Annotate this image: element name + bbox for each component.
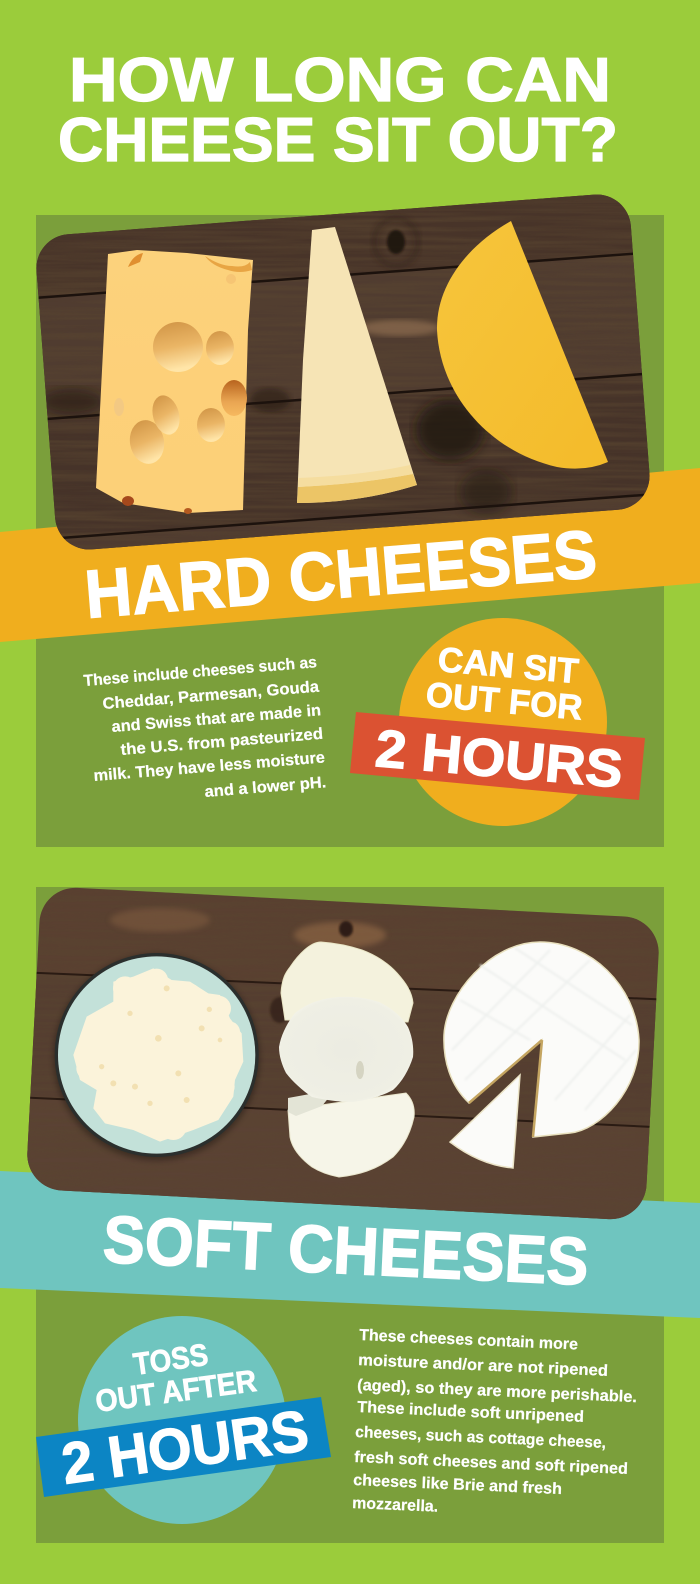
callout: toss out after 2 hours <box>36 1316 331 1524</box>
text: hard cheeses description: Cheddar, Parmesan, Gouda <box>102 679 320 713</box>
photo: soft cheeses on wood board <box>27 888 659 1220</box>
band: soft cheeses <box>0 1171 700 1318</box>
title: HOW LONG CAN <box>69 46 611 115</box>
panel: soft cheeses background <box>36 887 664 1543</box>
title: CHEESE SIT OUT? <box>58 106 618 175</box>
title <box>58 46 618 175</box>
text: hard cheeses description: and Swiss that are made in <box>111 702 322 736</box>
photo: hard cheeses on wood board <box>36 194 650 550</box>
callout: toss out after 2 hours: 2 HOURS <box>58 1398 312 1497</box>
text: soft cheeses description: mozzarella. <box>352 1495 438 1516</box>
cheese: mozzarella slices <box>279 942 414 1177</box>
text: soft cheeses description: These cheeses contain more <box>359 1327 578 1354</box>
callout: toss out after 2 hours: OUT AFTER <box>93 1363 259 1419</box>
text: hard cheeses description: and a lower pH. <box>204 774 327 801</box>
text: soft cheeses description: (aged), so they are more perishable. <box>357 1377 637 1406</box>
text: hard cheeses description <box>83 654 327 801</box>
text: soft cheeses description <box>352 1327 637 1516</box>
heading: soft cheeses: SOFT CHEESES <box>101 1202 590 1300</box>
cheese: brie wheel with cut wedge <box>444 942 639 1168</box>
text: soft cheeses description: fresh soft cheeses and soft ripened <box>354 1449 628 1478</box>
cheese: cottage cheese in bowl <box>53 953 260 1161</box>
heading: hard cheeses: HARD CHEESES <box>82 516 600 633</box>
text: hard cheeses description: the U.S. from pasteurized <box>120 726 324 759</box>
band: hard cheeses <box>0 468 700 642</box>
cheese: parmesan wedge <box>297 227 417 503</box>
callout: can sit out for 2 hours: OUT FOR <box>424 675 584 728</box>
cheese: gouda half wheel <box>437 221 608 469</box>
text: soft cheeses description: These include soft unripened <box>357 1399 584 1426</box>
text: soft cheeses description: moisture and/or are not ripened <box>358 1352 608 1380</box>
panel: hard cheeses background <box>36 215 664 847</box>
callout: can sit out for 2 hours: 2 HOURS <box>373 719 625 800</box>
cheese: swiss slab <box>96 250 253 514</box>
text: hard cheeses description: milk. They have less moisture <box>93 749 326 785</box>
callout: can sit out for 2 hours: CAN SIT <box>436 640 580 691</box>
callout: can sit out for 2 hours <box>350 618 645 826</box>
text: soft cheeses description: cheeses like Brie and fresh <box>353 1472 562 1498</box>
text: soft cheeses description: cheeses, such as cottage cheese, <box>355 1424 606 1452</box>
text: hard cheeses description: These include cheeses such as <box>83 654 318 690</box>
callout: toss out after 2 hours: TOSS <box>131 1337 210 1382</box>
